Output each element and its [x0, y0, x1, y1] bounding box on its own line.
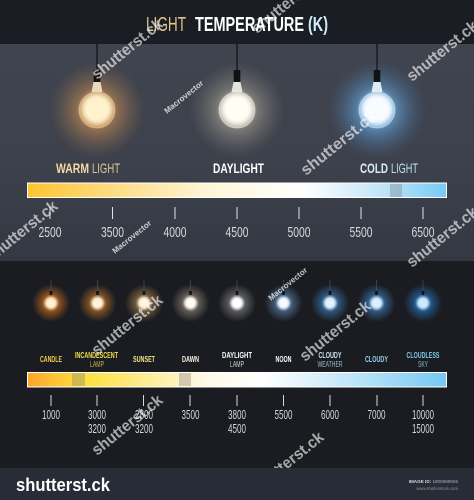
- icon: daylight bulb: [189, 44, 285, 158]
- scale ticks and values: 2500: [38, 225, 62, 241]
- source labels: CLOUDY: [318, 350, 342, 360]
- icon: dawn bulb: [172, 280, 210, 322]
- icon: incandescent bulb: [78, 280, 116, 322]
- source labels: DAYLIGHT: [222, 350, 253, 360]
- source ticks and values: 3500: [182, 408, 200, 422]
- source ticks and values: 3200: [88, 422, 106, 436]
- footer logo: shutterst.ck: [16, 475, 111, 495]
- label: cold light: LIGHT: [391, 160, 418, 176]
- icon: noon bulb: [264, 280, 302, 322]
- source ticks and values: 3800: [228, 408, 246, 422]
- title: [146, 14, 328, 36]
- source ticks and values: 1000: [42, 408, 60, 422]
- panel: large bulbs wall with color scale: [0, 44, 474, 261]
- watermarks: shutterst.ck: [89, 292, 166, 359]
- scale ticks and values: 4000: [164, 225, 186, 241]
- source ticks and values: 5500: [274, 408, 293, 422]
- source labels: DAWN: [182, 354, 199, 364]
- footer image id: [409, 479, 459, 491]
- source labels: [40, 350, 440, 369]
- icon: cloudy bulb: [358, 280, 396, 322]
- source ticks and values: 2800: [135, 408, 153, 422]
- scale ticks and values: 6500: [412, 225, 434, 241]
- scale ticks and values: 5000: [288, 225, 310, 241]
- watermarks: Macrovector: [163, 79, 205, 116]
- source labels: CANDLE: [40, 354, 62, 364]
- source labels: SKY: [418, 359, 428, 369]
- watermarks: shutterst.ck: [297, 298, 374, 365]
- color temperature scale bar: [28, 183, 446, 198]
- title: TEMPERATURE: [195, 14, 304, 36]
- label: warm light: [56, 160, 120, 176]
- label: cold light: COLD: [360, 160, 388, 176]
- source labels: CLOUDY: [365, 354, 388, 364]
- title: LIGHT: [146, 14, 186, 36]
- watermarks: Macrovector: [111, 219, 153, 256]
- watermark tiles on the scale bars: [72, 184, 402, 386]
- label: warm light: WARM: [56, 160, 89, 176]
- source labels: LAMP: [90, 359, 104, 369]
- panel: small bulbs sources: [32, 280, 442, 322]
- source ticks and values: 3000: [88, 408, 106, 422]
- panel: title band: [0, 0, 474, 44]
- watermarks: shutterst.ck: [250, 429, 327, 496]
- footer image id: IMAGE ID: 1805999506: [409, 479, 458, 484]
- panel: footer: [0, 468, 474, 500]
- source ticks and values: 4500: [228, 422, 246, 436]
- source labels: INCANDESCENT: [75, 350, 119, 360]
- source ticks and values: 10000: [412, 408, 434, 422]
- watermarks: shutterst.ck: [89, 392, 166, 459]
- icon: candle bulb: [32, 280, 70, 322]
- source ticks and values: 15000: [412, 422, 434, 436]
- source ticks and values: 3200: [135, 422, 153, 436]
- icon: sunset bulb: [125, 280, 163, 322]
- source ticks and values: 7000: [368, 408, 386, 422]
- icon: warm light bulb: [49, 44, 145, 158]
- watermarks: Macrovector: [267, 266, 309, 303]
- source labels: WEATHER: [318, 359, 342, 369]
- label: cold light: [360, 160, 418, 176]
- watermarks: shutterst.ck: [298, 108, 380, 179]
- icon: cold light bulb: [327, 44, 427, 160]
- scale ticks and values: 5500: [350, 225, 372, 241]
- icon: cloudless sky bulb: [404, 280, 442, 322]
- source labels: LAMP: [230, 359, 244, 369]
- scale ticks and values: 4500: [226, 225, 248, 241]
- source ticks and values: 6000: [321, 408, 339, 422]
- scale ticks and values: [38, 207, 434, 241]
- label: daylight: DAYLIGHT: [213, 160, 264, 176]
- source labels: SUNSET: [133, 354, 156, 364]
- icon: cloudy weather bulb: [311, 280, 349, 322]
- watermarks: shutterst.ck: [89, 16, 166, 83]
- title: (K): [308, 14, 328, 36]
- source labels: NOON: [276, 354, 292, 364]
- label: warm light: LIGHT: [92, 160, 120, 176]
- footer image id: www.shutterstock.com: [416, 486, 459, 491]
- scale ticks and values: 3500: [101, 225, 124, 241]
- source labels: CLOUDLESS: [406, 350, 440, 360]
- icon: daylight lamp bulb: [218, 280, 256, 322]
- source ticks and values: [42, 395, 434, 436]
- source color scale bar: [28, 372, 446, 387]
